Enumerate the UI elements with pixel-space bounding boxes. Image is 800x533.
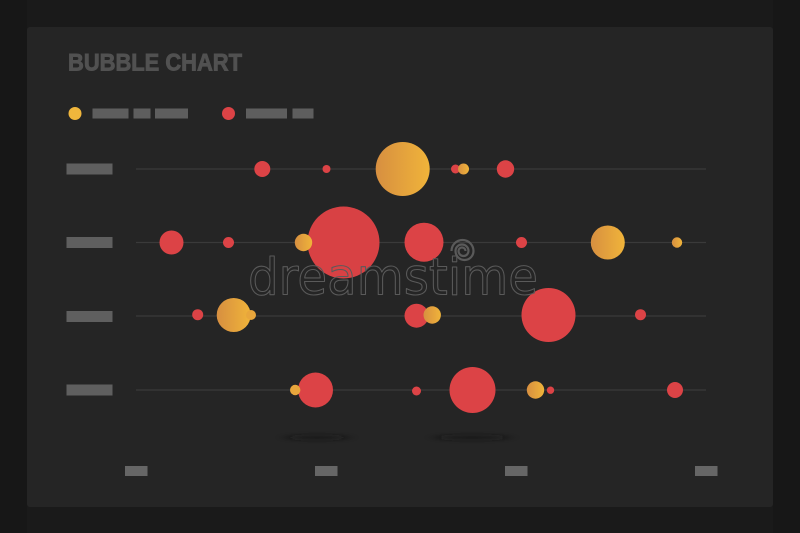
x axis ticks (125, 466, 718, 476)
legend item: red series (222, 107, 314, 120)
legend item: yellow series (68, 107, 188, 120)
watermark text: dreamstime (248, 248, 538, 308)
bubbles row 1 (254, 142, 514, 196)
row labels (66, 164, 112, 396)
bubbles row 4 (290, 367, 683, 413)
floating shadows (287, 436, 508, 439)
watermark (248, 240, 538, 308)
legend (68, 107, 314, 120)
title: BUBBLE CHART (68, 50, 242, 76)
icon: watermark spiral (452, 240, 474, 260)
bubbles row 2 (160, 206, 682, 278)
bubbles row 3 (192, 288, 646, 342)
